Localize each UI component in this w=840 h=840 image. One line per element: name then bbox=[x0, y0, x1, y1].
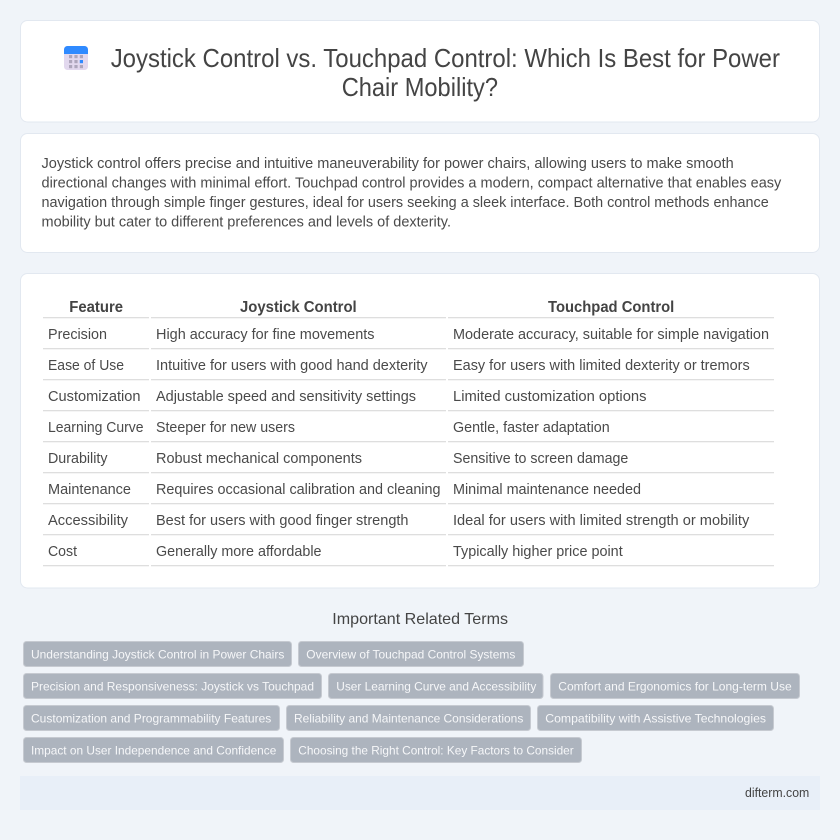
tag: Compatibility with Assistive Technologies bbox=[545, 711, 766, 725]
tag: User Learning Curve and Accessibility bbox=[336, 679, 536, 693]
tag bbox=[286, 706, 530, 730]
row: Learning Curve: Learning Curve bbox=[48, 420, 144, 436]
tag: Reliability and Maintenance Considerations bbox=[294, 711, 523, 725]
row: Accessibility: Accessibility bbox=[48, 513, 129, 529]
row: Learning Curve: Gentle, faster adaptation bbox=[453, 420, 610, 436]
row: Learning Curve: Steeper for new users bbox=[156, 420, 295, 436]
row: Customization: Adjustable speed and sensitivity settings bbox=[156, 389, 416, 405]
intro paragraph: navigation through simple finger gestures, ideal for users seeking a sleek interface. Both control methods enhance bbox=[42, 195, 769, 211]
row: Precision: High accuracy for fine movements bbox=[156, 327, 374, 343]
row: Customization: Limited customization options bbox=[453, 389, 646, 405]
row: Cost bbox=[43, 544, 774, 566]
footer site name: difterm.com bbox=[745, 785, 809, 800]
panel: comparison table bbox=[20, 274, 820, 588]
tag: Understanding Joystick Control in Power Chairs bbox=[31, 647, 284, 661]
tag: Overview of Touchpad Control Systems bbox=[306, 647, 515, 661]
panel: related term tags bbox=[24, 642, 800, 762]
row: Cost: Cost bbox=[48, 544, 77, 560]
tag bbox=[550, 674, 800, 698]
tag bbox=[298, 642, 524, 666]
tag: Comfort and Ergonomics for Long-term Use bbox=[558, 679, 792, 693]
row: Accessibility bbox=[43, 513, 774, 535]
tag: Customization and Programmability Features bbox=[31, 711, 271, 725]
tag bbox=[24, 706, 280, 730]
row: Ease of Use: Intuitive for users with good hand dexterity bbox=[156, 358, 428, 374]
intro paragraph: mobility but cater to different preferences and levels of dexterity. bbox=[42, 214, 451, 230]
row: Ease of Use: Easy for users with limited dexterity or tremors bbox=[453, 358, 750, 374]
row: Durability: Robust mechanical components bbox=[156, 451, 362, 467]
row: Maintenance: Requires occasional calibration and cleaning bbox=[156, 482, 440, 498]
row: Cost: Typically higher price point bbox=[453, 544, 623, 560]
tag bbox=[24, 642, 292, 666]
row: Durability: Sensitive to screen damage bbox=[453, 451, 628, 467]
row: Precision: Moderate accuracy, suitable for simple navigation bbox=[453, 327, 769, 343]
table header row: Joystick Control bbox=[240, 299, 357, 316]
panel: introduction bbox=[20, 134, 820, 252]
intro paragraph: directional changes with minimal effort. Touchpad control provides a modern, compact alternative that enables easy bbox=[42, 176, 782, 192]
tag bbox=[24, 738, 284, 762]
panel: title header bbox=[20, 20, 820, 122]
title: Joystick Control vs. Touchpad Control: Which Is Best for Power bbox=[111, 45, 780, 73]
row: Durability: Durability bbox=[48, 451, 108, 467]
row: Ease of Use bbox=[43, 358, 774, 380]
tag bbox=[538, 706, 774, 730]
tag bbox=[328, 674, 543, 698]
row: Durability bbox=[43, 451, 774, 473]
table header row: Feature bbox=[69, 299, 123, 316]
intro paragraph bbox=[42, 156, 782, 230]
heading: related terms: Important Related Terms bbox=[332, 611, 508, 628]
table header row bbox=[43, 299, 774, 318]
footer bar bbox=[20, 776, 820, 810]
row: Maintenance bbox=[43, 482, 774, 504]
tag bbox=[24, 674, 322, 698]
row: Maintenance: Minimal maintenance needed bbox=[453, 482, 641, 498]
icon: calendar bbox=[64, 46, 88, 70]
row: Cost: Generally more affordable bbox=[156, 544, 322, 560]
title bbox=[111, 45, 780, 102]
row: Customization: Customization bbox=[48, 389, 140, 405]
title: Chair Mobility? bbox=[342, 74, 498, 102]
row: Precision bbox=[43, 327, 774, 349]
tag bbox=[290, 738, 582, 762]
tag: Choosing the Right Control: Key Factors to Consider bbox=[298, 743, 574, 757]
row: Accessibility: Best for users with good finger strength bbox=[156, 513, 408, 529]
table header row: Touchpad Control bbox=[548, 299, 674, 316]
tag: Impact on User Independence and Confidence bbox=[31, 743, 277, 757]
row: Ease of Use: Ease of Use bbox=[48, 358, 124, 374]
intro paragraph: Joystick control offers precise and intuitive maneuverability for power chairs, allowing users to make smooth bbox=[42, 156, 734, 172]
row: Maintenance: Maintenance bbox=[48, 482, 131, 498]
row: Customization bbox=[43, 389, 774, 411]
tag: Precision and Responsiveness: Joystick vs Touchpad bbox=[31, 679, 314, 693]
row: Learning Curve bbox=[43, 420, 774, 442]
row: Precision: Precision bbox=[48, 327, 107, 343]
row: Accessibility: Ideal for users with limited strength or mobility bbox=[453, 513, 750, 529]
